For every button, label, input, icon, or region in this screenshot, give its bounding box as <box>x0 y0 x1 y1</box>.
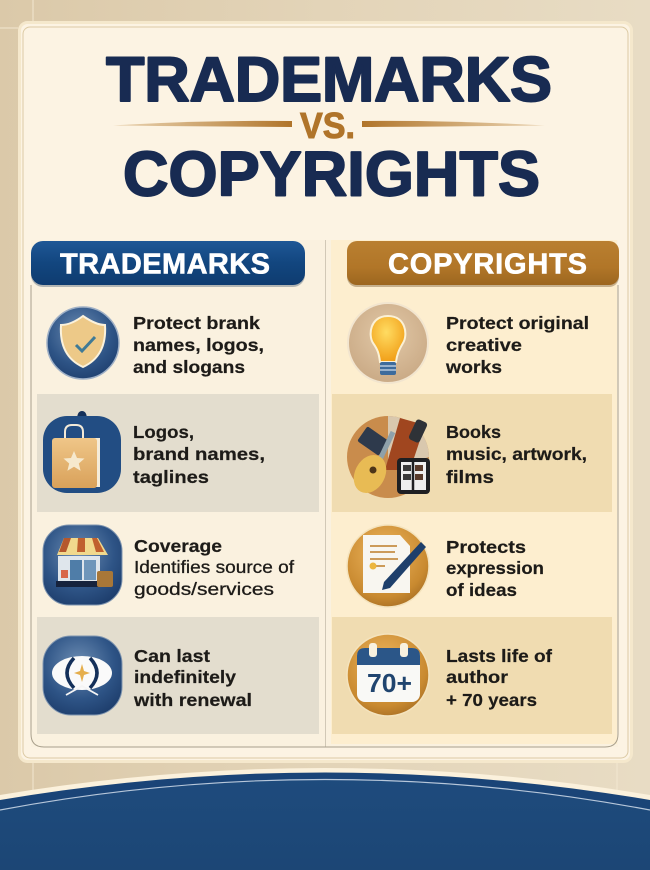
text: coverage: Identifies source of <box>134 557 294 577</box>
film strip box <box>397 458 430 494</box>
icon: calendar 70+ <box>347 634 429 716</box>
header: copyrights <box>347 241 619 287</box>
text: protects expression: Protects <box>446 537 526 557</box>
icon: calendar 70+: 70+ <box>367 668 412 698</box>
text: books <box>446 422 587 487</box>
text: can last: with renewal <box>133 690 252 710</box>
text: protect original: works <box>445 357 502 377</box>
text: can last: Can last <box>134 646 210 666</box>
text: lasts life: + 70 years <box>446 690 537 710</box>
text: logos: Logos, <box>133 422 194 442</box>
text: protect brands: Protect brank <box>133 313 260 333</box>
text: books: music, artwork, <box>446 444 587 464</box>
row band 4 <box>332 617 612 734</box>
text: coverage: Coverage <box>134 536 222 556</box>
text: logos: brand names, <box>133 444 265 464</box>
row band 2 <box>332 394 612 512</box>
text: can last <box>133 646 252 710</box>
text: protect brands <box>133 313 264 377</box>
icon: shopping bag <box>43 411 121 493</box>
text: logos: taglines <box>133 467 209 487</box>
text: books: Books <box>446 422 501 442</box>
header: copyrights: COPYRIGHTS <box>388 249 587 281</box>
versus divider: VS. <box>300 105 355 146</box>
panel: copyrights <box>326 240 619 747</box>
text: protects expression: of ideas <box>446 580 517 600</box>
row band 2 <box>37 394 319 512</box>
text: lasts life <box>446 646 552 710</box>
title: TRADEMARKS <box>106 45 552 115</box>
text: logos <box>133 422 265 487</box>
title <box>106 45 552 210</box>
text: protects expression <box>446 537 544 600</box>
text: protect original: Protect original <box>446 313 589 333</box>
icon: light bulb <box>348 303 428 383</box>
outer framed panel <box>20 22 632 762</box>
text: protect original <box>445 313 589 377</box>
row band 4 <box>37 617 319 734</box>
footer wave <box>0 768 650 870</box>
icon: storefront <box>43 525 122 605</box>
text: protect brands: names, logos, <box>133 335 264 355</box>
panel: trademarks <box>31 240 326 747</box>
text: lasts life: Lasts life of <box>446 646 552 666</box>
text: coverage: goods/services <box>134 579 274 599</box>
icon: document and pen <box>347 525 429 607</box>
icon: shield <box>47 307 119 379</box>
text: protects expression: expression <box>446 558 544 578</box>
header: trademarks: TRADEMARKS <box>60 249 270 281</box>
title: COPYRIGHTS <box>123 140 540 210</box>
text: lasts life: author <box>446 667 508 687</box>
text: can last: indefinitely <box>134 667 236 687</box>
header: trademarks <box>31 241 305 287</box>
icon: guitar and film <box>347 416 430 499</box>
versus divider <box>113 105 545 146</box>
text: protect brands: and slogans <box>133 357 245 377</box>
text: coverage <box>134 536 294 599</box>
icon: emblem <box>43 636 122 715</box>
text: protect original: creative <box>446 335 522 355</box>
text: books: films <box>446 467 494 487</box>
